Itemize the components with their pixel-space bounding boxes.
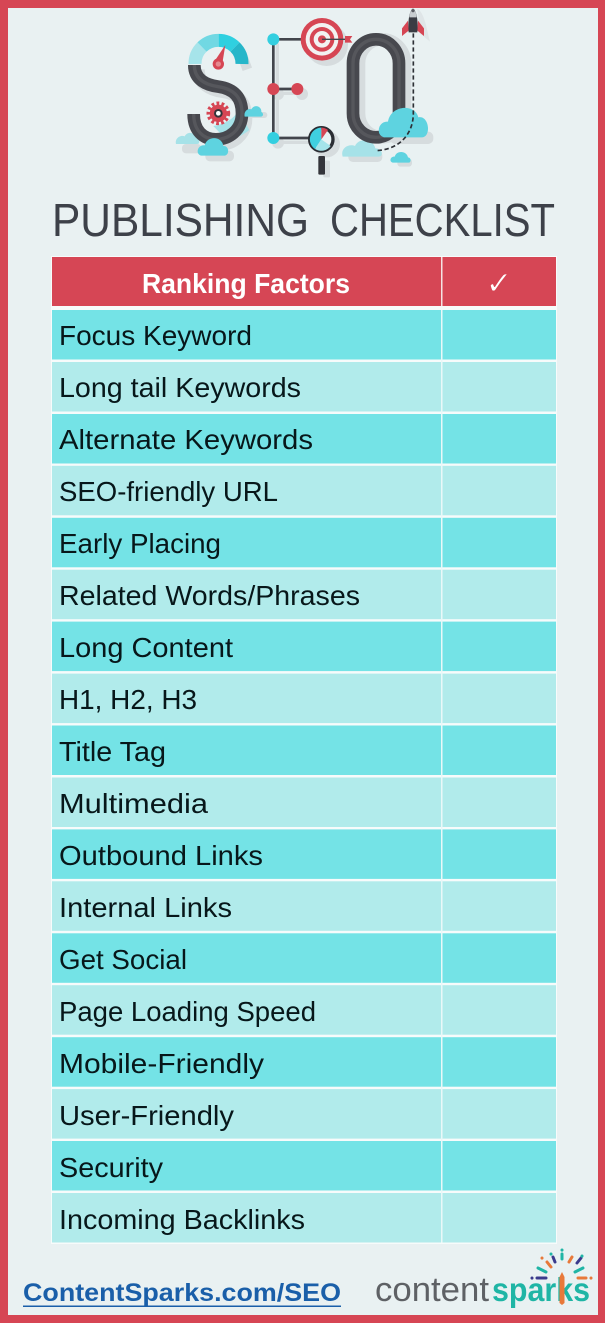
row: Related Words/Phrases <box>52 570 556 619</box>
title: PUBLISHING <box>52 194 309 246</box>
icon: E nodes <box>267 33 303 144</box>
icon: gauge arc <box>195 40 242 64</box>
row: Get Social <box>52 933 556 983</box>
icon: clouds behind letters <box>176 110 382 157</box>
row: User-Friendly: User-Friendly <box>59 1100 234 1131</box>
logo: contentsparks: sparks <box>492 1271 590 1308</box>
title <box>52 194 555 246</box>
table header: Ranking Factors <box>142 268 350 299</box>
row: Mobile-Friendly: Mobile-Friendly <box>59 1048 264 1079</box>
icon: cloud on O <box>379 108 428 137</box>
icon: rocket with dashed trail <box>375 8 430 151</box>
table header <box>52 257 556 306</box>
row: Incoming Backlinks: Incoming Backlinks <box>59 1204 305 1235</box>
table header: ✓ <box>486 264 512 302</box>
table: ranking factors checklist <box>51 256 557 1244</box>
logo wordmark: content <box>375 1271 490 1309</box>
row: Multimedia <box>52 778 556 827</box>
row: Early Placing: Early Placing <box>59 528 221 559</box>
row: Multimedia: Multimedia <box>59 788 208 819</box>
row: Mobile-Friendly <box>52 1037 556 1087</box>
icon: S letter road <box>194 65 242 139</box>
row: Security <box>52 1141 556 1190</box>
icon: cloud under S <box>198 138 228 156</box>
row: Long Content <box>52 622 556 671</box>
row: Page Loading Speed <box>52 985 556 1035</box>
row: Outbound Links: Outbound Links <box>59 840 263 871</box>
row: Early Placing <box>52 518 556 567</box>
row: H1, H2, H3 <box>52 674 556 723</box>
icon: gauge needle <box>213 45 225 70</box>
row: Incoming Backlinks <box>52 1193 556 1242</box>
row: Related Words/Phrases: Related Words/Phrases <box>59 580 360 611</box>
row: Security: Security <box>59 1152 163 1183</box>
icon: pencil <box>560 1272 564 1305</box>
footer link: ContentSparks.com/SEO <box>23 1279 341 1307</box>
column divider <box>441 310 442 1242</box>
icon: magnifying glass <box>310 128 333 175</box>
row: Internal Links: Internal Links <box>59 892 232 923</box>
row: Long tail Keywords: Long tail Keywords <box>59 372 301 403</box>
icon: E letter connectors <box>273 39 310 138</box>
row: SEO-friendly URL: SEO-friendly URL <box>59 476 278 507</box>
icon: O letter road <box>353 39 399 137</box>
row: Alternate Keywords <box>52 414 556 464</box>
row: SEO-friendly URL <box>52 466 556 515</box>
icon: soft shadows <box>182 23 433 177</box>
row: Long Content: Long Content <box>59 632 233 663</box>
row: Focus Keyword: Focus Keyword <box>59 320 252 351</box>
row: Page Loading Speed: Page Loading Speed <box>59 996 316 1027</box>
row: Focus Keyword <box>52 310 556 360</box>
row: Title Tag: Title Tag <box>59 736 166 767</box>
row: Title Tag <box>52 726 556 775</box>
icon: small cloud on S <box>244 106 263 117</box>
row: User-Friendly <box>52 1089 556 1139</box>
row: Get Social: Get Social <box>59 944 187 975</box>
icon: SEO illustration <box>176 8 433 177</box>
logo: contentsparks <box>375 1250 591 1309</box>
title: CHECKLIST <box>330 194 555 246</box>
row: Internal Links <box>52 881 556 931</box>
icon: small cloud lower right <box>390 152 411 163</box>
icon: gear <box>209 104 228 123</box>
icon: spark rays <box>532 1250 591 1278</box>
row: Long tail Keywords <box>52 362 556 412</box>
icon: target with arrow <box>301 18 352 61</box>
row: Alternate Keywords: Alternate Keywords <box>59 424 313 455</box>
row: H1, H2, H3: H1, H2, H3 <box>59 684 197 715</box>
row: Outbound Links <box>52 829 556 879</box>
